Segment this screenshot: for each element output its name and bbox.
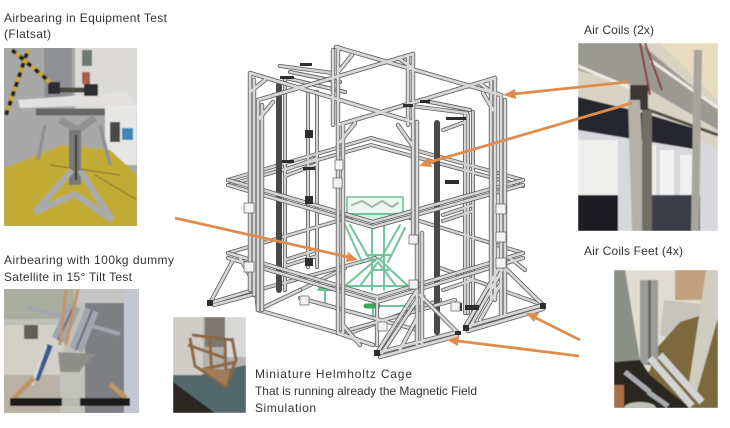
front frame members [250,47,543,357]
side plates [244,160,506,331]
green airbearing model [318,197,425,316]
heading: airbearing with dummy satellite: Satellite in 15° Tilt Test [4,270,133,284]
arrow: airbearing pointer [175,218,358,262]
photo: miniature cage [173,317,246,413]
photo: tilt test [4,289,139,413]
label: air coils: Air Coils (2x) [584,23,654,37]
heading: airbearing in equipment test: (Flatsat) [4,27,51,41]
heading: airbearing with dummy satellite: Airbearing with 100kg dummy [4,253,174,267]
arrow: upper coil pointer [503,82,627,99]
caption: miniature helmholtz cage: Simulation [255,401,316,415]
middle frame members [210,180,525,345]
heading: airbearing in equipment test [4,11,168,41]
caption: miniature helmholtz cage: Miniature Helmholtz Cage [255,367,412,381]
photo: air coils [578,43,718,231]
caption: miniature helmholtz cage [255,367,477,415]
heading: airbearing in equipment test: Airbearing in Equipment Test [4,11,168,25]
label: air coils feet: Air Coils Feet (4x) [584,244,683,258]
back frame members [210,66,543,333]
joint brackets [207,63,546,356]
photo: flatsat airbearing [4,48,137,226]
caption: miniature helmholtz cage: That is running already the Magnetic Field [255,384,477,398]
arrow: front foot pointer [447,336,579,356]
heading: airbearing with dummy satellite [4,253,174,284]
diagram: helmholtz cage frame with airbearing [207,47,546,357]
arrow: inner coil pointer [419,103,632,167]
photo: air coils feet [614,270,718,408]
arrow: right foot pointer [526,313,580,340]
